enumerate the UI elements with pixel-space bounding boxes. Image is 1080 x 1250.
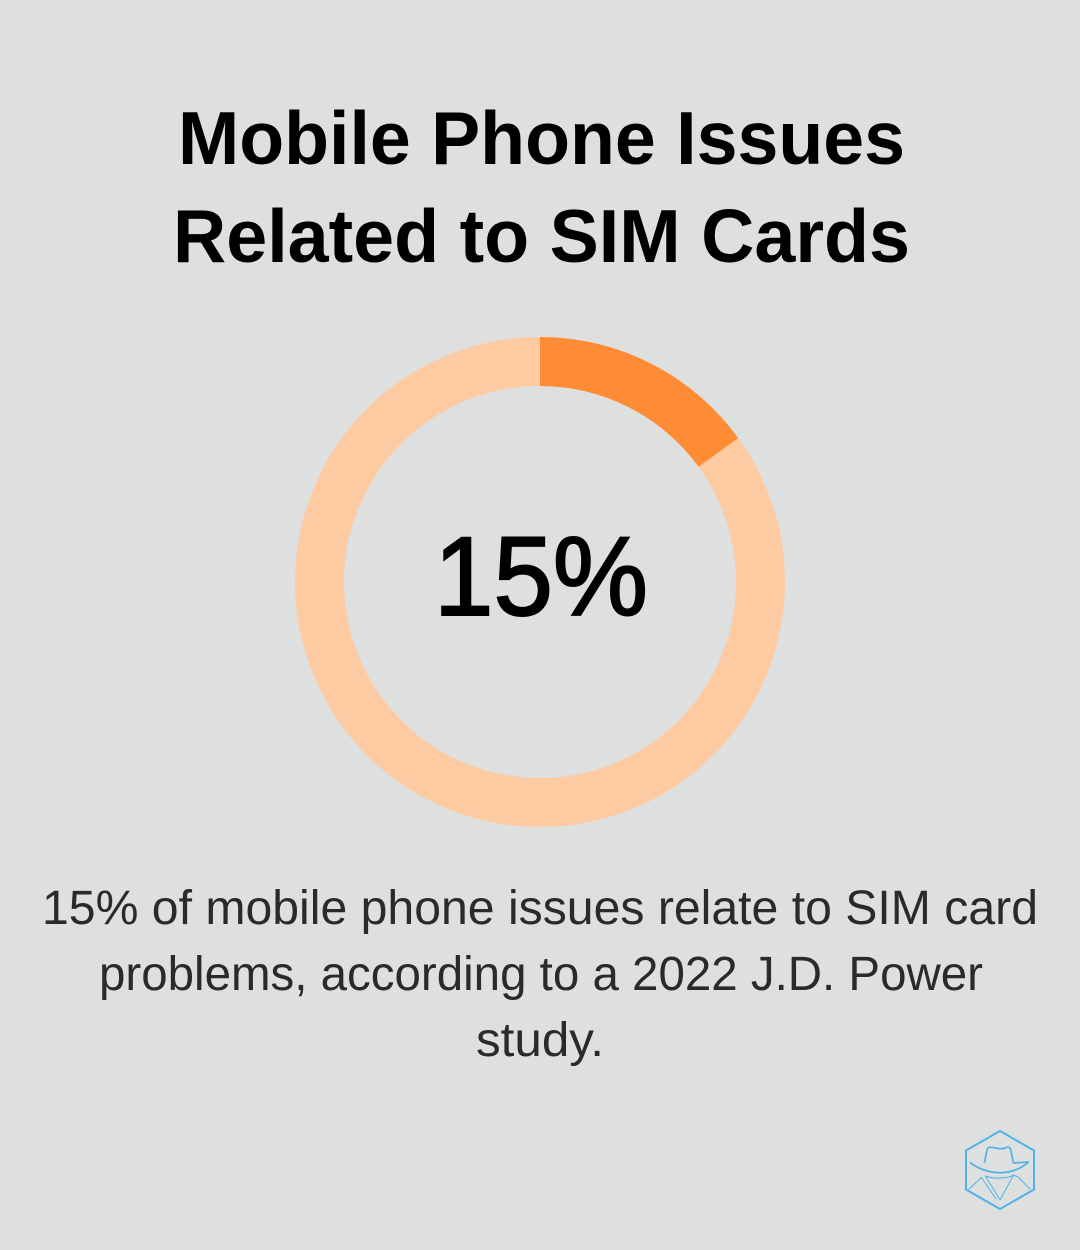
donut center value: 15% <box>434 514 648 639</box>
title <box>173 96 910 278</box>
logo hat <box>970 1147 1028 1173</box>
logo coat collar <box>969 1175 1030 1200</box>
icon: logo hexagon with spy hat <box>966 1131 1034 1209</box>
description text: 15% of mobile phone issues relate to SIM card <box>42 882 1038 935</box>
donut track <box>320 362 760 802</box>
donut chart: 15 percent <box>320 337 760 802</box>
donut highlighted segment <box>540 337 738 467</box>
description text: study. <box>476 1014 604 1067</box>
title: Mobile Phone Issues <box>178 96 905 180</box>
description text: problems, according to a 2022 J.D. Power <box>99 948 983 1001</box>
description text <box>42 882 1038 1067</box>
logo hexagon <box>966 1131 1034 1209</box>
title: Related to SIM Cards <box>173 194 910 278</box>
